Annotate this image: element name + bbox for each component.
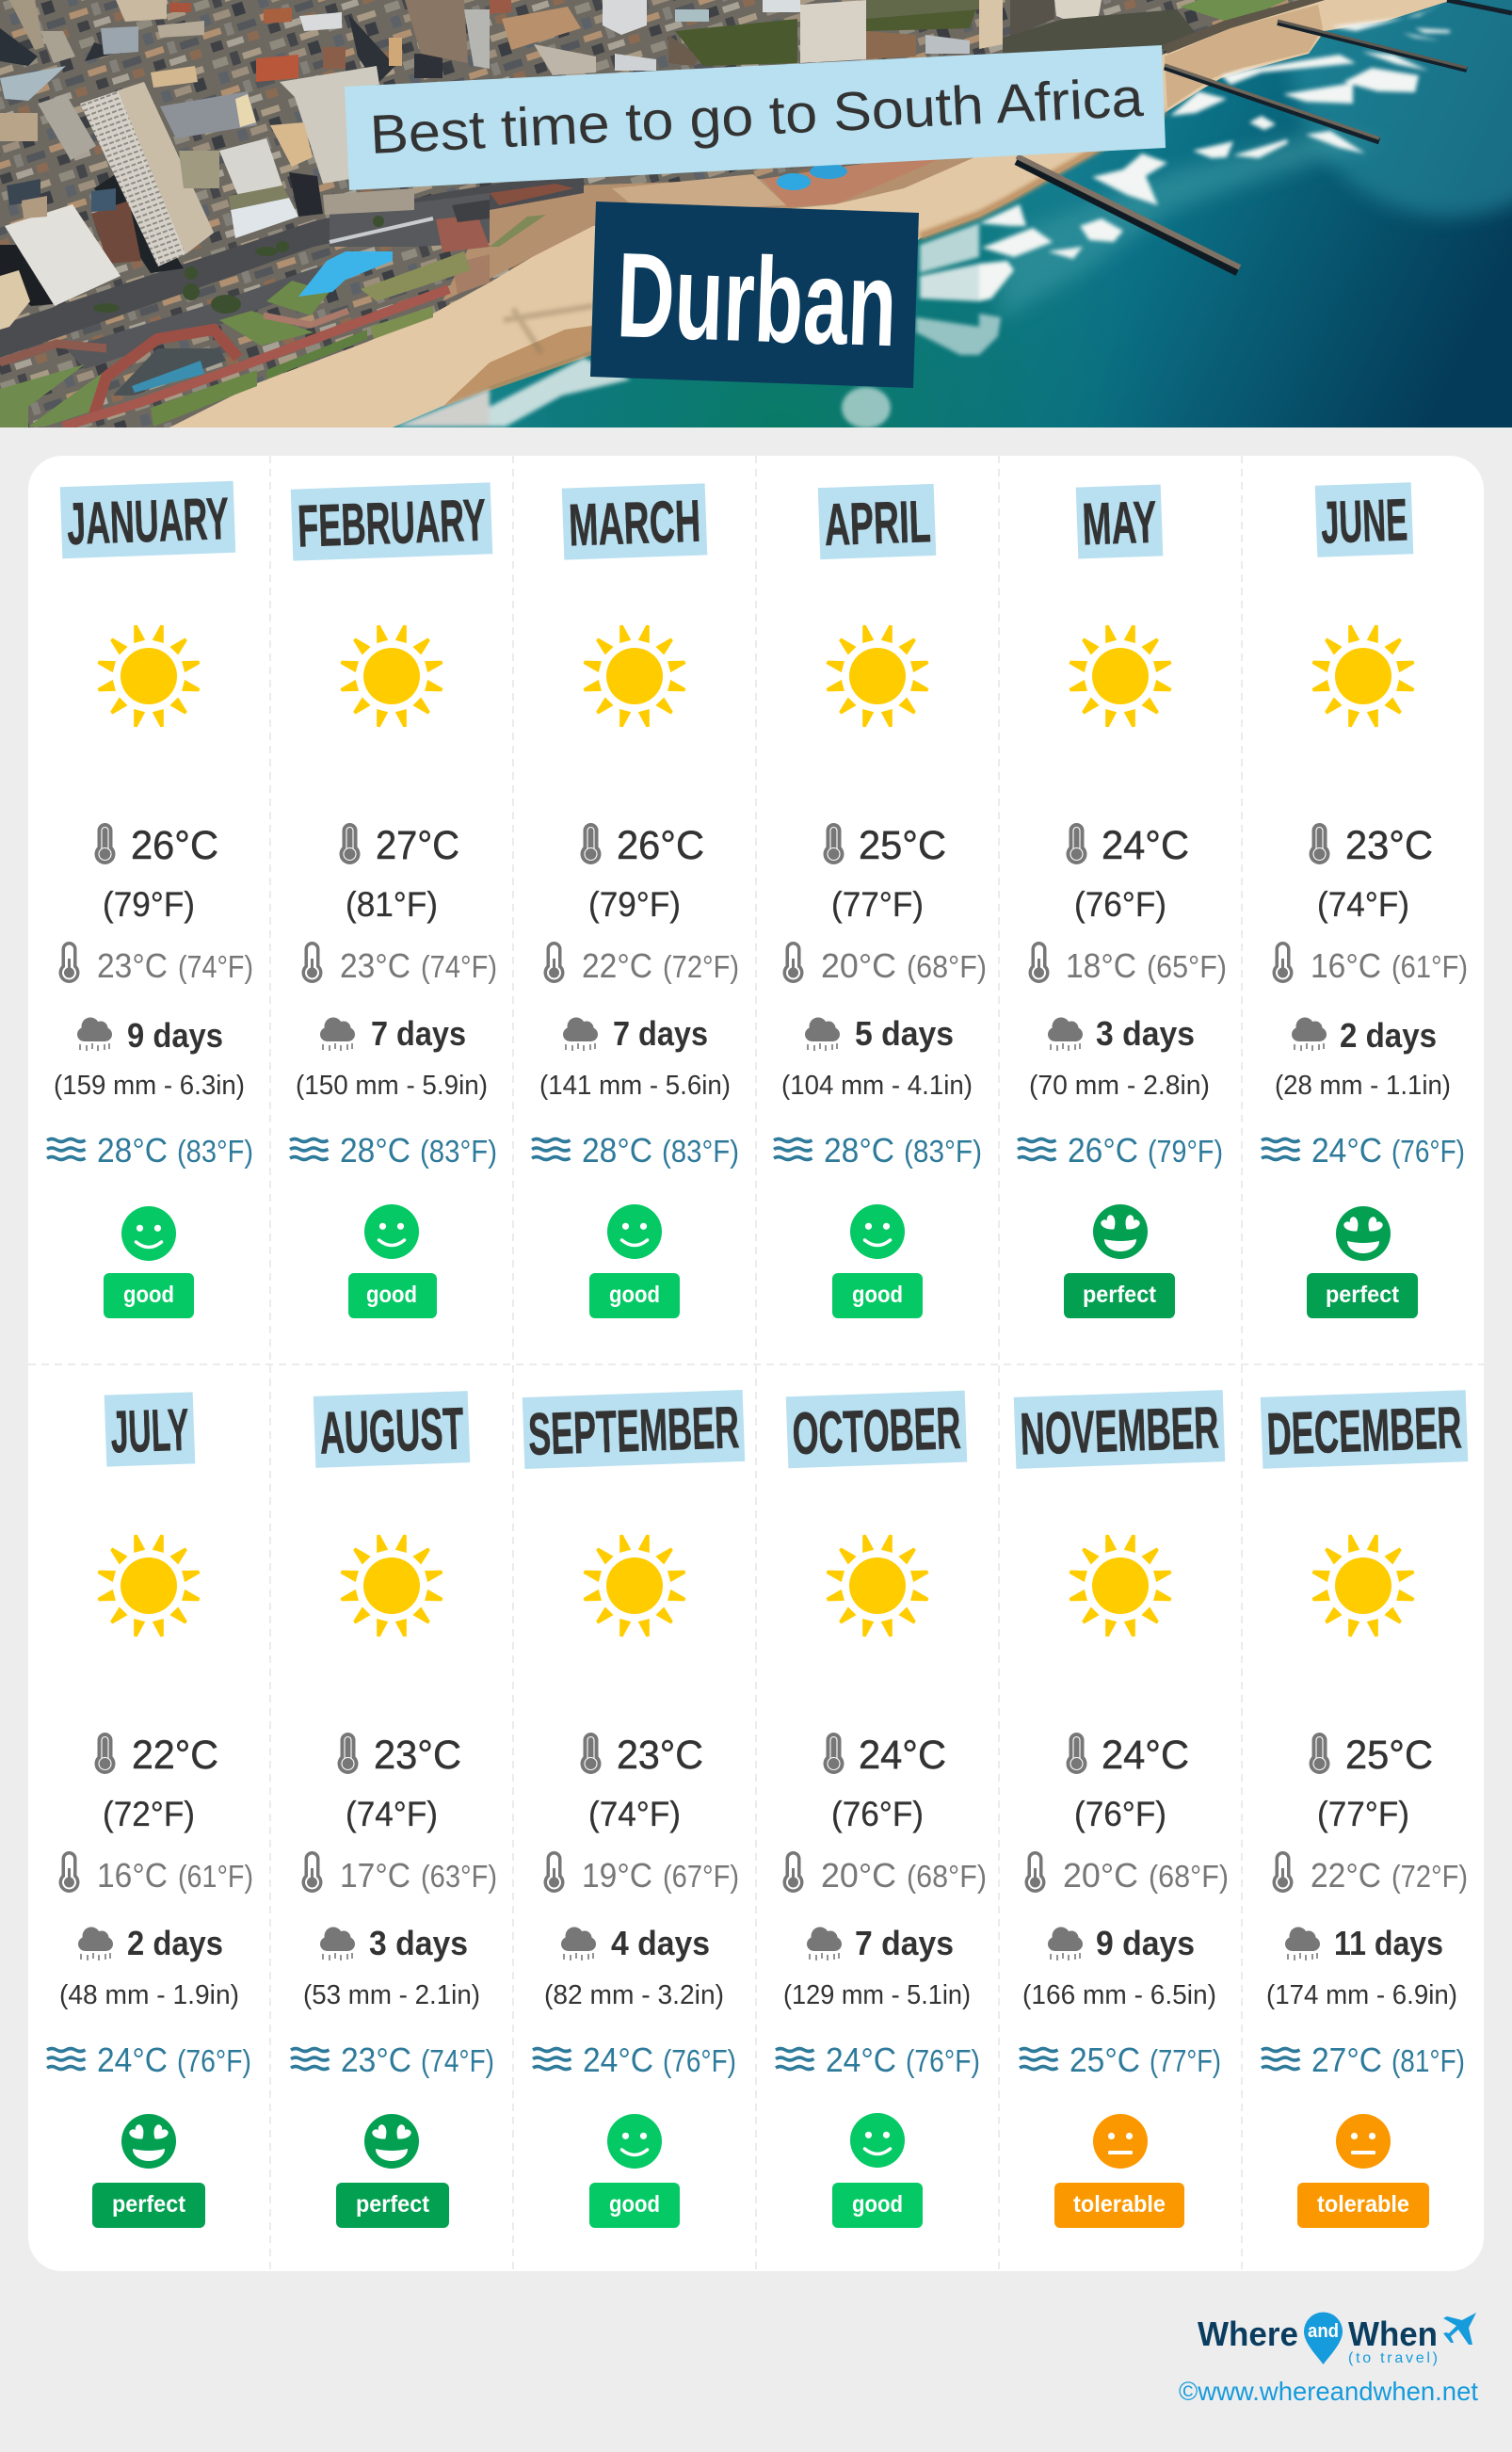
- month label: October: [786, 1391, 967, 1468]
- icon: thermometer low: [58, 1851, 79, 1893]
- month label: May: [1076, 484, 1163, 559]
- icon: thermometer high: [1066, 1733, 1086, 1774]
- icon: plane: [1443, 2313, 1476, 2345]
- sea temperature: (83°F): [662, 1134, 739, 1169]
- icon: waves: [532, 1139, 571, 1160]
- month label: June: JUNE: [1320, 487, 1408, 557]
- trees: [93, 216, 384, 314]
- daytime temperature: 26°C: [131, 823, 218, 868]
- night temperature: [340, 946, 497, 985]
- sea temperature: (83°F): [420, 1134, 497, 1169]
- icon: waves: [47, 1139, 85, 1160]
- icon: thermometer low: [1273, 942, 1294, 983]
- sea temperature: [341, 2041, 494, 2079]
- arched building: [113, 348, 226, 395]
- month label: February: [291, 482, 492, 561]
- rainy days: 7 days: [371, 1014, 466, 1053]
- icon: rain cloud: [563, 1017, 598, 1051]
- rainy days: 7 days: [613, 1014, 708, 1053]
- panel: monthly climate card: [28, 456, 1484, 2271]
- rainy days: 7 days: [855, 1924, 954, 1962]
- daytime temperature in F: (74°F): [1317, 885, 1409, 924]
- sea temperature: [340, 1131, 497, 1170]
- promenade paving: [442, 155, 979, 301]
- rating badge: tolerable: tolerable: [1073, 2191, 1166, 2218]
- month label: October: OCTOBER: [791, 1395, 962, 1467]
- dark shadows: [94, 169, 184, 273]
- daytime temperature in F: (72°F): [103, 1795, 195, 1833]
- red paths: [94, 330, 238, 414]
- month label: May: MAY: [1081, 490, 1158, 557]
- icon: perfect face: [1093, 1204, 1148, 1259]
- icon: sun: [1311, 625, 1415, 727]
- pool: [298, 251, 393, 297]
- night temperature: 20°C: [821, 946, 896, 985]
- night temperature: 17°C: [340, 1856, 410, 1895]
- icon: thermometer high: [337, 1733, 358, 1774]
- rating badge: tolerable: [1054, 2183, 1184, 2228]
- icon: waves: [774, 1139, 812, 1160]
- icon: thermometer high: [94, 1733, 115, 1774]
- sea temperature: [583, 2041, 736, 2079]
- sea temperature: (76°F): [663, 2043, 736, 2078]
- night temperature: [582, 1856, 739, 1895]
- header photo: aerial view of Durban beachfront: [0, 0, 1512, 428]
- logo: Where and When (to travel): (to travel): [1348, 2350, 1438, 2366]
- daytime temperature: 25°C: [1345, 1733, 1433, 1778]
- icon: sun: [583, 1535, 686, 1637]
- city name box: Durban: Durban: [615, 228, 899, 372]
- night temperature: 16°C: [1311, 946, 1381, 985]
- night temperature: [1311, 946, 1468, 985]
- icon: map pin with and: [1304, 2313, 1343, 2364]
- icon: good face: [607, 2114, 662, 2169]
- month label: April: APRIL: [823, 489, 932, 558]
- daytime temperature: 23°C: [617, 1733, 703, 1778]
- icon: rain cloud: [1285, 1927, 1320, 1960]
- night temperature: (72°F): [1391, 1859, 1468, 1894]
- night temperature: [1063, 1856, 1229, 1895]
- sea temperature: [97, 2041, 251, 2079]
- icon: sun: [826, 1535, 929, 1637]
- night temperature: 23°C: [340, 946, 410, 985]
- night temperature: 20°C: [1063, 1856, 1138, 1895]
- icon: sun: [340, 1535, 443, 1637]
- icon: waves: [533, 2049, 571, 2070]
- icon: rain cloud: [320, 1017, 355, 1051]
- month label: March: MARCH: [568, 489, 701, 558]
- sea temperature: [824, 1131, 982, 1170]
- sea temperature: 27°C: [1311, 2041, 1382, 2079]
- icon: waves: [291, 2049, 330, 2070]
- rating badge: good: good: [609, 2191, 660, 2218]
- daytime temperature in F: (81°F): [346, 885, 438, 924]
- rainfall: (159 mm - 6.3in): [54, 1071, 245, 1101]
- icon: perfect face: [121, 2114, 176, 2169]
- rainy days: 2 days: [127, 1924, 223, 1962]
- icon: thermometer low: [783, 942, 804, 983]
- rainy days: 11 days: [1334, 1924, 1443, 1962]
- night temperature: (65°F): [1147, 949, 1227, 984]
- rating badge: perfect: perfect: [356, 2191, 430, 2218]
- rating badge: good: good: [123, 1282, 174, 1308]
- sea temperature: (76°F): [906, 2043, 980, 2078]
- icon: map pin with and: and: [1308, 2321, 1339, 2342]
- night temperature: 22°C: [582, 946, 652, 985]
- icon: good face: [364, 1204, 419, 1259]
- month label: January: JANUARY: [66, 486, 230, 557]
- daytime temperature: 23°C: [374, 1733, 461, 1778]
- cell: April: [774, 484, 987, 1318]
- rating badge: perfect: perfect: [1326, 1282, 1400, 1308]
- logo: Where and When (to travel): [1198, 2313, 1476, 2366]
- rainfall: (141 mm - 5.6in): [539, 1071, 731, 1101]
- rainfall: (166 mm - 6.5in): [1022, 1980, 1216, 2010]
- rating badge: tolerable: tolerable: [1317, 2191, 1409, 2218]
- icon: thermometer high: [94, 823, 115, 864]
- daytime temperature in F: (79°F): [588, 885, 681, 924]
- sea temperature: (77°F): [1150, 2043, 1221, 2078]
- icon: sun: [1069, 1535, 1172, 1637]
- rating badge: good: [104, 1273, 194, 1318]
- title strip: Best time to go to South Africa: Best time to go to South Africa: [368, 67, 1145, 166]
- rainfall: (70 mm - 2.8in): [1029, 1071, 1210, 1101]
- icon: thermometer high: [580, 1733, 601, 1774]
- sea temperature: (83°F): [177, 1134, 253, 1169]
- daytime temperature in F: (74°F): [588, 1795, 681, 1833]
- icon: sun: [826, 625, 929, 727]
- night temperature: (61°F): [1391, 949, 1468, 984]
- rainfall: (129 mm - 5.1in): [783, 1980, 971, 2010]
- sea temperature: (83°F): [904, 1134, 982, 1169]
- night temperature: (61°F): [178, 1859, 253, 1894]
- icon: thermometer high: [1066, 823, 1086, 864]
- rainy days: 9 days: [127, 1016, 223, 1055]
- daytime temperature in F: (74°F): [346, 1795, 438, 1833]
- foam: [395, 3, 1450, 428]
- sea temperature: [1068, 1131, 1223, 1170]
- rainfall: (104 mm - 4.1in): [781, 1071, 973, 1101]
- rainy days: 9 days: [1096, 1924, 1195, 1962]
- night temperature: 20°C: [821, 1856, 896, 1895]
- month label: August: [314, 1391, 470, 1468]
- month label: June: [1315, 482, 1413, 557]
- daytime temperature: 27°C: [376, 823, 459, 868]
- icon: waves: [47, 2049, 85, 2070]
- rating badge: good: [832, 1273, 923, 1318]
- icon: thermometer high: [339, 823, 360, 864]
- icon: waves: [1262, 2049, 1299, 2070]
- night temperature: 16°C: [97, 1856, 168, 1895]
- rating badge: perfect: perfect: [112, 2191, 186, 2218]
- night temperature: (63°F): [421, 1859, 497, 1894]
- daytime temperature: 22°C: [132, 1733, 218, 1778]
- sea temperature: (76°F): [177, 2043, 251, 2078]
- icon: neutral face: [1093, 2114, 1148, 2169]
- daytime temperature in F: (77°F): [831, 885, 924, 924]
- icon: rain cloud: [78, 1927, 113, 1960]
- month label: November: [1014, 1390, 1225, 1469]
- cell: June: [1262, 482, 1468, 1318]
- icon: rain cloud: [1048, 1017, 1083, 1051]
- rating badge: perfect: [1064, 1273, 1175, 1318]
- title strip: Best time to go to South Africa: [345, 45, 1166, 190]
- night temperature: [582, 946, 739, 985]
- night temperature: (74°F): [178, 949, 253, 984]
- rating badge: perfect: [336, 2183, 449, 2228]
- rainfall: (28 mm - 1.1in): [1275, 1071, 1451, 1101]
- rainy days: 3 days: [1096, 1014, 1195, 1053]
- jetties: [1017, 0, 1512, 271]
- cell: February: [290, 482, 497, 1318]
- logo: Where and When (to travel): Where: [1198, 2315, 1298, 2353]
- round pools: [777, 173, 811, 190]
- night temperature: [821, 1856, 987, 1895]
- night temperature: [1066, 946, 1227, 985]
- sea temperature: 28°C: [824, 1131, 894, 1170]
- rating badge: good: good: [852, 1282, 903, 1308]
- daytime temperature: 23°C: [1345, 823, 1433, 868]
- icon: thermometer high: [580, 823, 601, 864]
- rating badge: good: good: [852, 2191, 903, 2218]
- night temperature: [1311, 1856, 1468, 1895]
- sea temperature: 24°C: [97, 2041, 168, 2079]
- sea temperature: [1070, 2041, 1221, 2079]
- icon: thermometer low: [1024, 1851, 1045, 1893]
- logo: Where and When (to travel): When: [1348, 2315, 1438, 2353]
- daytime temperature: 24°C: [859, 1733, 946, 1778]
- icon: waves: [1020, 2049, 1058, 2070]
- icon: thermometer high: [1309, 1733, 1329, 1774]
- icon: waves: [1018, 1139, 1056, 1160]
- daytime temperature in F: (79°F): [103, 885, 195, 924]
- month label: January: [60, 481, 235, 558]
- night temperature: [821, 946, 987, 985]
- daytime temperature in F: (77°F): [1317, 1795, 1409, 1833]
- icon: neutral face: [1336, 2114, 1391, 2169]
- rating badge: good: [589, 1273, 680, 1318]
- icon: rain cloud: [805, 1017, 840, 1051]
- daytime temperature in F: (76°F): [1074, 1795, 1166, 1833]
- icon: perfect face: [364, 2114, 419, 2169]
- sea temperature: 28°C: [582, 1131, 652, 1170]
- icon: sun: [340, 625, 443, 727]
- cell: March: [532, 483, 739, 1318]
- daytime temperature: 26°C: [617, 823, 704, 868]
- rainfall: (174 mm - 6.9in): [1266, 1980, 1457, 2010]
- icon: thermometer high: [823, 1733, 844, 1774]
- month label: July: JULY: [109, 1397, 190, 1465]
- rating badge: perfect: [1307, 1273, 1418, 1318]
- rainfall: (150 mm - 5.9in): [296, 1071, 488, 1101]
- website credit: ©www.whereandwhen.net: [1179, 2377, 1478, 2406]
- night temperature: (74°F): [421, 949, 497, 984]
- month label: September: [523, 1390, 745, 1469]
- night temperature: [97, 1856, 253, 1895]
- city name box: Durban: [590, 202, 919, 388]
- icon: waves: [290, 1139, 328, 1160]
- night temperature: [340, 1856, 497, 1895]
- sea temperature: 26°C: [1068, 1131, 1138, 1170]
- night temperature: 22°C: [1311, 1856, 1381, 1895]
- daytime temperature in F: (76°F): [1074, 885, 1166, 924]
- rating badge: good: good: [366, 1282, 417, 1308]
- night temperature: (72°F): [663, 949, 739, 984]
- rainfall: (53 mm - 2.1in): [303, 1980, 480, 2010]
- rating badge: good: good: [609, 1282, 660, 1308]
- icon: thermometer high: [1309, 823, 1329, 864]
- icon: thermometer low: [58, 942, 79, 983]
- night temperature: [97, 946, 253, 985]
- rating badge: good: [589, 2183, 680, 2228]
- daytime temperature: 24°C: [1102, 823, 1189, 868]
- upper middle city: [490, 0, 511, 14]
- lawns: [219, 311, 314, 346]
- icon: sun: [97, 1535, 201, 1637]
- rainy days: 3 days: [369, 1924, 468, 1962]
- sea temperature: [1311, 2041, 1465, 2079]
- sea temperature: [97, 1131, 253, 1170]
- icon: good face: [850, 2113, 905, 2168]
- icon: sun: [1311, 1535, 1415, 1637]
- sea temperature: (81°F): [1391, 2043, 1465, 2078]
- cell: September: [523, 1390, 745, 2228]
- sea temperature: 24°C: [583, 2041, 653, 2079]
- sea temperature: [826, 2041, 980, 2079]
- sea temperature: (79°F): [1148, 1134, 1223, 1169]
- rainfall: (82 mm - 3.2in): [544, 1980, 724, 2010]
- sea temperature: [582, 1131, 739, 1170]
- month label: February: FEBRUARY: [297, 488, 487, 559]
- icon: good face: [850, 1204, 905, 1259]
- cell: July: [47, 1392, 253, 2228]
- sea temperature: 28°C: [340, 1131, 410, 1170]
- night temperature: (68°F): [1149, 1859, 1229, 1894]
- night temperature: 19°C: [582, 1856, 652, 1895]
- month label: September: SEPTEMBER: [527, 1395, 740, 1468]
- icon: good face: [121, 1206, 176, 1261]
- land base: [0, 0, 1455, 427]
- rainy days: 4 days: [611, 1924, 710, 1962]
- city buildings: [91, 201, 141, 264]
- night temperature: (68°F): [907, 1859, 987, 1894]
- road band: [0, 169, 584, 358]
- icon: sun: [97, 625, 201, 727]
- icon: rain cloud: [77, 1017, 112, 1051]
- night temperature: (67°F): [663, 1859, 739, 1894]
- icon: thermometer low: [1273, 1851, 1294, 1893]
- rainy days: 2 days: [1340, 1016, 1437, 1055]
- icon: thermometer low: [301, 942, 322, 983]
- cell: October: [776, 1391, 987, 2228]
- icon: good face: [607, 1204, 662, 1259]
- icon: rain cloud: [561, 1927, 596, 1960]
- icon: thermometer low: [544, 1851, 565, 1893]
- sea temperature: 28°C: [97, 1131, 168, 1170]
- rainy days: 5 days: [855, 1014, 954, 1053]
- sea temperature: 23°C: [341, 2041, 411, 2079]
- night temperature: 18°C: [1066, 946, 1136, 985]
- sea temperature: 25°C: [1070, 2041, 1140, 2079]
- month label: April: [818, 484, 936, 559]
- rating badge: perfect: perfect: [1083, 1282, 1157, 1308]
- daytime temperature in F: (76°F): [831, 1795, 924, 1833]
- rating badge: good: [348, 1273, 437, 1318]
- icon: waves: [776, 2049, 813, 2070]
- icon: waves: [1262, 1139, 1299, 1160]
- rating badge: perfect: [92, 2183, 205, 2228]
- icon: thermometer high: [823, 823, 844, 864]
- icon: sun: [1069, 625, 1172, 727]
- icon: rain cloud: [1048, 1927, 1083, 1960]
- icon: thermometer low: [783, 1851, 804, 1893]
- month label: July: [105, 1392, 195, 1467]
- rating badge: tolerable: [1297, 2183, 1429, 2228]
- sand: [169, 0, 1455, 427]
- icon: rain cloud: [807, 1927, 842, 1960]
- rating badge: good: [832, 2183, 923, 2228]
- month label: November: NOVEMBER: [1019, 1395, 1220, 1468]
- daytime temperature: 24°C: [1102, 1733, 1189, 1778]
- sea temperature: (76°F): [1391, 1134, 1465, 1169]
- icon: perfect face: [1336, 1206, 1391, 1261]
- cell: January: [47, 481, 253, 1318]
- cell: November: [1014, 1390, 1229, 2228]
- icon: thermometer low: [1028, 942, 1049, 983]
- cell: August: [291, 1391, 497, 2228]
- icon: thermometer low: [301, 1851, 322, 1893]
- icon: sun: [583, 625, 686, 727]
- month label: August: AUGUST: [318, 1395, 465, 1467]
- icon: rain cloud: [1292, 1017, 1327, 1051]
- sea temperature: 24°C: [826, 2041, 896, 2079]
- sea temperature: 24°C: [1311, 1131, 1382, 1170]
- daytime temperature: 25°C: [859, 823, 946, 868]
- night temperature: (68°F): [907, 949, 987, 984]
- night temperature: 23°C: [97, 946, 168, 985]
- icon: thermometer low: [544, 942, 565, 983]
- month label: March: [562, 483, 707, 560]
- rainfall: (48 mm - 1.9in): [59, 1980, 239, 2010]
- icon: rain cloud: [320, 1927, 355, 1960]
- cell: December: [1261, 1390, 1468, 2228]
- sea temperature: [1311, 1131, 1465, 1170]
- cell: May: [1018, 484, 1227, 1318]
- sea temperature: (74°F): [421, 2043, 494, 2078]
